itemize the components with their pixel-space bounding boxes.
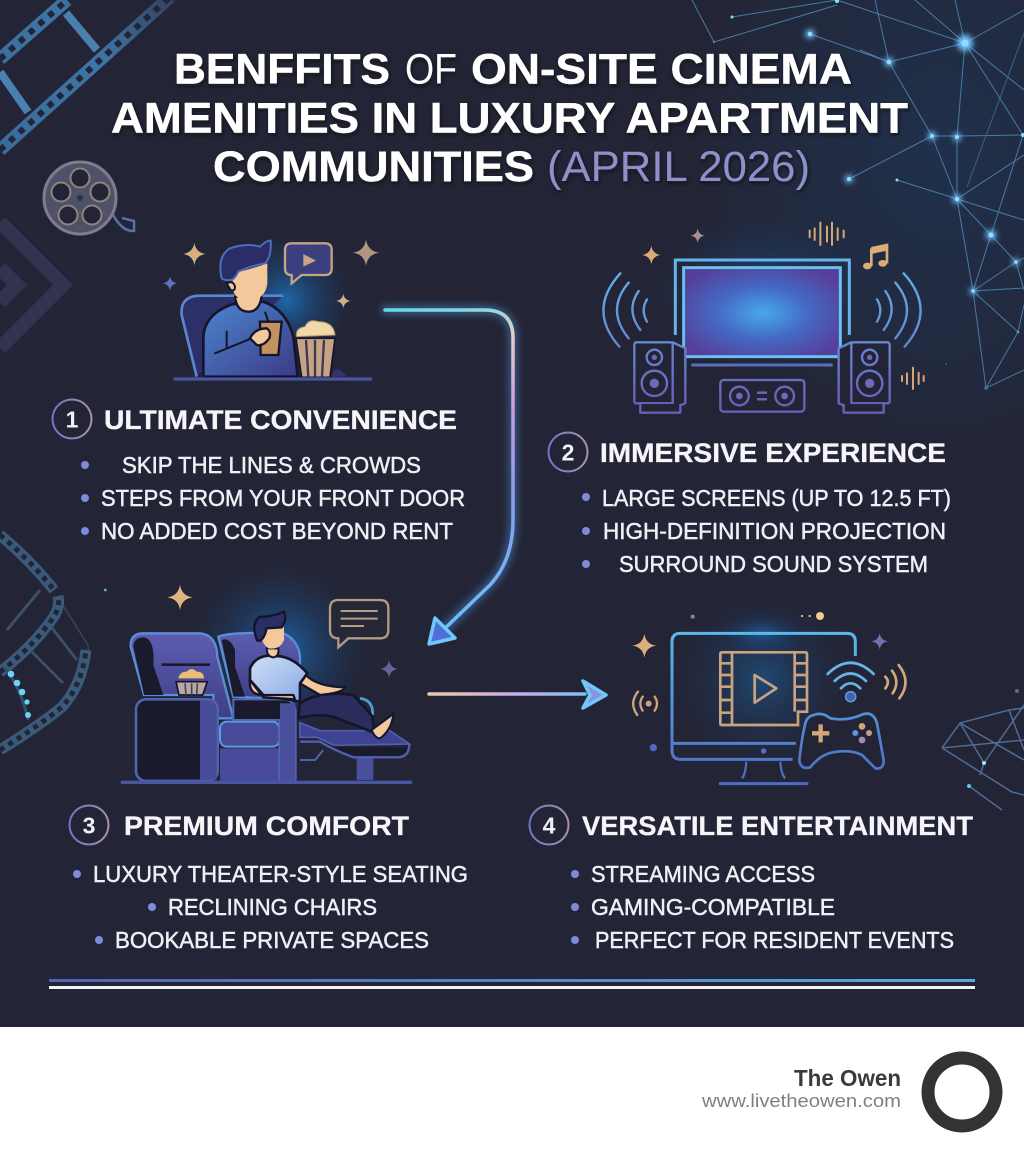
- title: AMENITIES IN LUXURY APARTMENT: [111, 94, 908, 142]
- panel: versatile entertainment: 4: [543, 812, 556, 838]
- icon: home theater: [603, 213, 924, 413]
- arrow: comfort to entertainment: [429, 681, 606, 708]
- panel: premium comfort: RECLINING CHAIRS: [168, 894, 377, 920]
- title: COMMUNITIES: [213, 143, 534, 191]
- panel: premium comfort: PREMIUM COMFORT: [124, 811, 410, 841]
- decoration: film strip top left: [0, 0, 170, 150]
- decoration: diamond right: [942, 689, 1024, 810]
- panel: immersive experience: [548, 432, 951, 577]
- icon: man in recliners: [104, 563, 411, 782]
- logo ring: [928, 1058, 996, 1126]
- icon: person with popcorn: [163, 233, 379, 379]
- icon: film reel: [44, 162, 134, 234]
- decoration: chevrons left: [0, 222, 63, 348]
- decoration: network top right: [692, 0, 1024, 390]
- panel: immersive experience: 2: [562, 440, 574, 466]
- icon: monitor with streaming and gaming: [632, 593, 906, 784]
- panel: immersive experience: IMMERSIVE EXPERIENCE: [600, 438, 946, 468]
- panel: ultimate convenience: SKIP THE LINES & CROWDS: [122, 452, 421, 478]
- title: [111, 46, 908, 191]
- panel: versatile entertainment: PERFECT FOR RESIDENT EVENTS: [595, 927, 954, 953]
- panel: premium comfort: BOOKABLE PRIVATE SPACES: [115, 927, 429, 953]
- panel: premium comfort: LUXURY THEATER-STYLE SEATING: [93, 861, 468, 887]
- title: BENFFITS: [174, 46, 390, 94]
- panel: versatile entertainment: STREAMING ACCESS: [591, 861, 815, 887]
- panel: ultimate convenience: NO ADDED COST BEYOND RENT: [101, 518, 453, 544]
- decoration: curved film strip left: [0, 535, 88, 750]
- panel: immersive experience: HIGH-DEFINITION PROJECTION: [603, 518, 946, 544]
- divider rules: [49, 979, 975, 989]
- panel: premium comfort: 3: [83, 812, 95, 838]
- panel: versatile entertainment: VERSATILE ENTERTAINMENT: [582, 811, 974, 841]
- title: ON-SITE CINEMA: [471, 46, 852, 94]
- network glow: [680, 0, 1024, 440]
- footer: [0, 1027, 1024, 1154]
- panel: immersive experience: LARGE SCREENS (UP TO 12.5 FT): [602, 485, 951, 511]
- panel: immersive experience: SURROUND SOUND SYSTEM: [619, 551, 928, 577]
- panel: versatile entertainment: GAMING-COMPATIBLE: [591, 894, 835, 920]
- title: (APRIL 2026): [547, 143, 810, 191]
- panel: ultimate convenience: [52, 400, 465, 544]
- panel: versatile entertainment: [530, 806, 974, 953]
- brand name: The Owen: [794, 1065, 901, 1091]
- panel: ultimate convenience: ULTIMATE CONVENIENCE: [104, 405, 457, 435]
- website: www.livetheowen.com: [701, 1091, 901, 1111]
- panel: ultimate convenience: STEPS FROM YOUR FRONT DOOR: [101, 485, 465, 511]
- panel: ultimate convenience: 1: [66, 406, 79, 432]
- arrow: convenience to comfort: [385, 310, 513, 644]
- title: OF: [405, 46, 457, 94]
- panel: premium comfort: [70, 806, 468, 953]
